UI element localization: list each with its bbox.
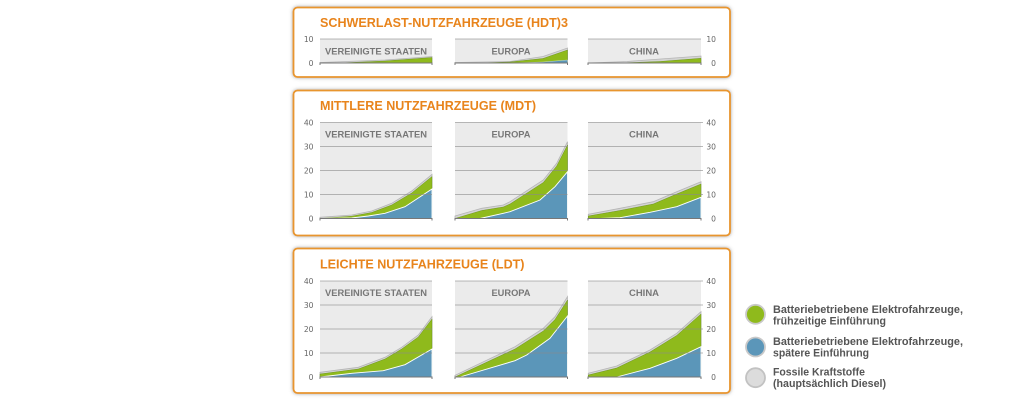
legend item: later adoption battery electric: Batteriebetriebene Elektrofahrzeuge, — [773, 336, 963, 348]
chart: MDT Europe — [455, 122, 568, 220]
axis labels right: LDT: 0 — [711, 373, 716, 382]
region label: CHINA — [629, 128, 659, 140]
axis labels left: HDT — [304, 35, 314, 68]
axis labels right: MDT: 40 — [706, 118, 716, 128]
axis labels right: LDT — [706, 277, 716, 382]
region label: EUROPA — [492, 287, 531, 298]
legend item: early adoption battery electric: Batteriebetriebene Elektrofahrzeuge, — [773, 304, 963, 316]
panel: heavy-duty trucks — [294, 8, 730, 77]
axis labels right: MDT: 0 — [711, 214, 716, 224]
axis labels right: HDT: 10 — [706, 35, 716, 44]
legend item: later adoption battery electric — [746, 336, 963, 360]
legend item: early adoption battery electric — [746, 304, 963, 328]
legend item: fossil fuels: (hauptsächlich Diesel) — [773, 378, 886, 390]
axis labels left: HDT: 10 — [304, 35, 314, 44]
region label: VEREINIGTE STAATEN — [325, 287, 427, 298]
legend item: fossil fuels: Fossile Kraftstoffe — [773, 366, 865, 378]
legend item: early adoption battery electric: frühzeitige Einführung — [773, 316, 886, 328]
axis labels left: MDT: 10 — [304, 190, 314, 200]
legend item: later adoption battery electric: spätere Einführung — [773, 348, 869, 360]
heading: MDT: MITTLERE NUTZFAHRZEUGE (MDT) — [320, 99, 536, 113]
axis labels right: LDT: 40 — [706, 277, 716, 286]
axis labels right: MDT: 10 — [706, 190, 716, 200]
axis labels left: MDT: 0 — [309, 214, 314, 224]
heading: LDT: LEICHTE NUTZFAHRZEUGE (LDT) — [320, 257, 524, 271]
axis labels right: MDT: 20 — [706, 166, 716, 176]
region label: CHINA — [629, 287, 659, 298]
region label: EUROPA — [492, 46, 531, 56]
region label: CHINA — [629, 46, 659, 56]
panel: medium-duty trucks — [294, 90, 730, 236]
region label: VEREINIGTE STAATEN — [325, 128, 427, 140]
axis labels right: LDT: 10 — [706, 349, 716, 358]
axis labels right: LDT: 20 — [706, 325, 716, 334]
legend item: fossil fuels — [746, 366, 886, 390]
axis labels left: LDT: 10 — [304, 349, 314, 358]
chart: LDT United States — [320, 281, 432, 379]
heading: HDT: SCHWERLAST-NUTZFAHRZEUGE (HDT)3 — [320, 16, 568, 30]
axis labels right: HDT: 0 — [711, 59, 716, 68]
axis labels right: MDT — [706, 118, 716, 224]
chart: MDT United States — [320, 122, 432, 220]
chart: HDT United States — [320, 39, 432, 65]
axis labels left: LDT: 0 — [309, 373, 314, 382]
axis labels left: LDT: 20 — [304, 325, 314, 334]
panel: light-duty trucks — [294, 248, 730, 393]
chart: MDT China — [588, 122, 703, 220]
chart: HDT China — [588, 39, 701, 65]
axis labels left: HDT: 0 — [309, 59, 314, 68]
chart: LDT China — [588, 281, 703, 379]
axis labels right: HDT — [706, 35, 716, 68]
axis labels left: MDT: 40 — [304, 118, 314, 128]
chart: HDT Europe — [455, 39, 568, 65]
axis labels left: LDT — [304, 277, 314, 382]
axis labels left: LDT: 30 — [304, 301, 314, 310]
region label: EUROPA — [492, 128, 531, 140]
chart: LDT Europe — [455, 281, 568, 379]
region label: VEREINIGTE STAATEN — [325, 46, 427, 56]
axis labels left: LDT: 40 — [304, 277, 314, 286]
axis labels right: LDT: 30 — [706, 301, 716, 310]
axis labels right: MDT: 30 — [706, 142, 716, 152]
axis labels left: MDT: 20 — [304, 166, 314, 176]
axis labels left: MDT — [304, 118, 314, 224]
axis labels left: MDT: 30 — [304, 142, 314, 152]
legend — [746, 304, 963, 390]
